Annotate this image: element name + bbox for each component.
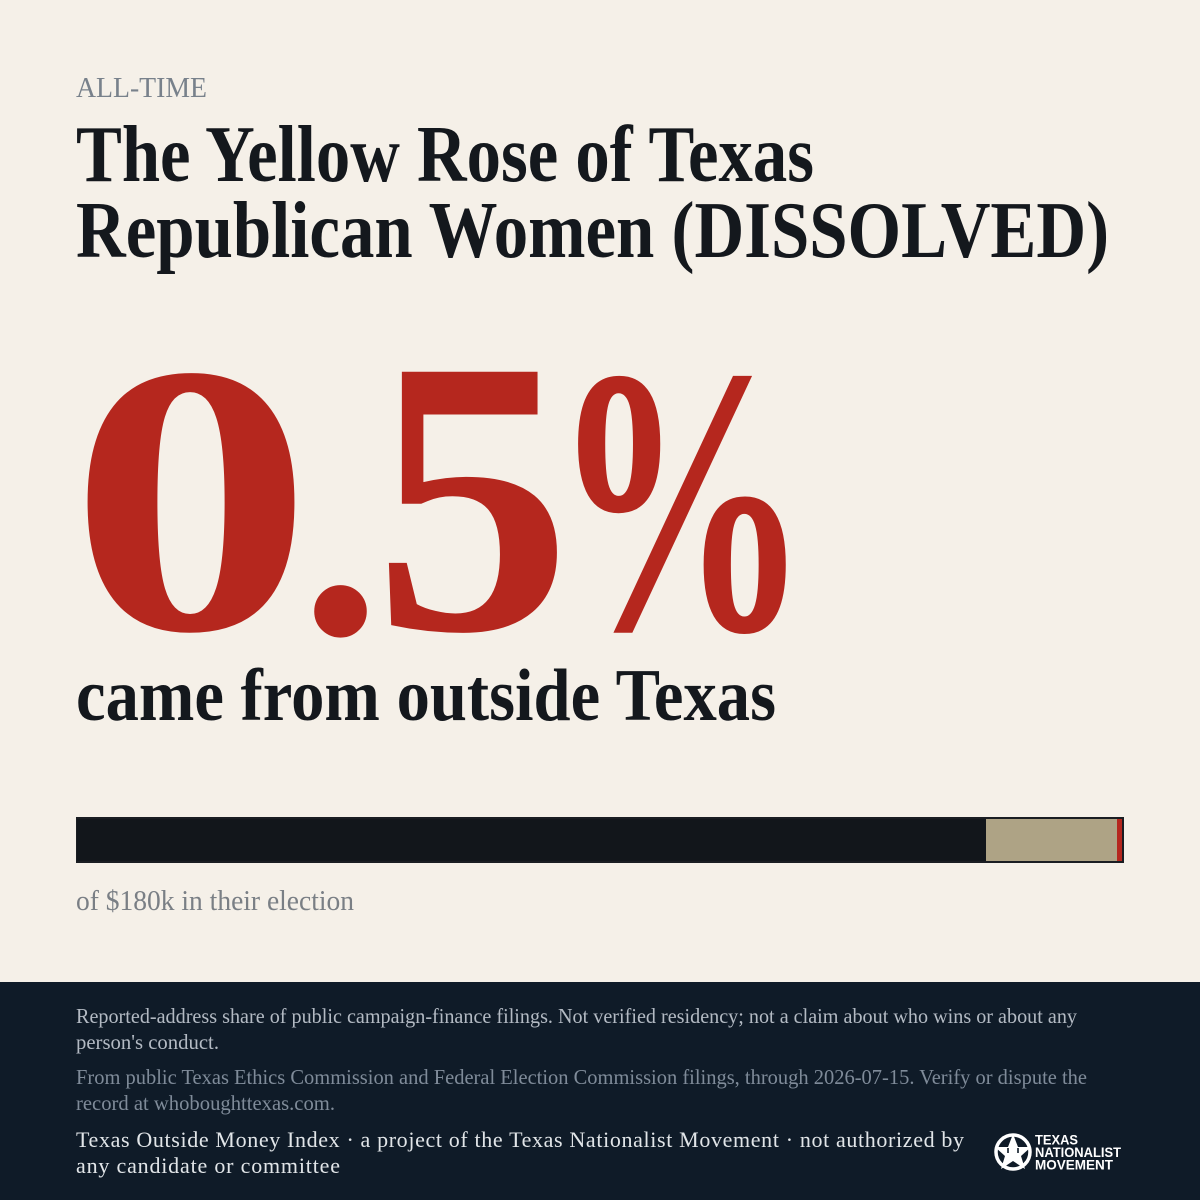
attribution text: Texas Outside Money Index · a project of the Texas Nationalist Movement · not authorized by — [76, 1127, 964, 1152]
disclaimer text — [76, 1004, 1077, 1054]
statistic caption: came from outside Texas — [76, 655, 776, 737]
logo wordmark: NATIONALIST — [1035, 1145, 1122, 1160]
title: The Yellow Rose of Texas — [76, 111, 814, 199]
footer panel — [0, 982, 1200, 1200]
logo wordmark: TEXAS — [1035, 1132, 1078, 1148]
logo: Texas Nationalist Movement — [995, 1132, 1122, 1172]
source text: From public Texas Ethics Commission and Federal Election Commission filings, through 2026-07-15. Verify or dispute the — [76, 1065, 1087, 1089]
icon: star in circle — [995, 1134, 1031, 1169]
big statistic 0.5%: 5 — [373, 280, 571, 715]
big statistic 0.5%: % — [552, 291, 810, 712]
title — [76, 111, 1109, 275]
logo wordmark — [1035, 1132, 1122, 1172]
stacked share bar — [76, 817, 1124, 863]
big statistic 0.5%: 0 — [69, 287, 313, 713]
source text: record at whoboughttexas.com. — [76, 1091, 335, 1115]
disclaimer text: person's conduct. — [76, 1030, 219, 1054]
big statistic 0.5%: . — [300, 345, 381, 704]
big statistic 0.5% — [69, 280, 810, 715]
disclaimer text: Reported-address share of public campaign-finance filings. Not verified residency; not a claim about who wins or about any — [76, 1004, 1077, 1028]
logo wordmark: MOVEMENT — [1035, 1158, 1114, 1172]
attribution text: any candidate or committee — [76, 1153, 340, 1178]
attribution text — [76, 1127, 964, 1178]
bar caption: of $180k in their election — [76, 886, 354, 917]
eyebrow label: ALL-TIME — [76, 73, 207, 104]
source text — [76, 1065, 1087, 1115]
